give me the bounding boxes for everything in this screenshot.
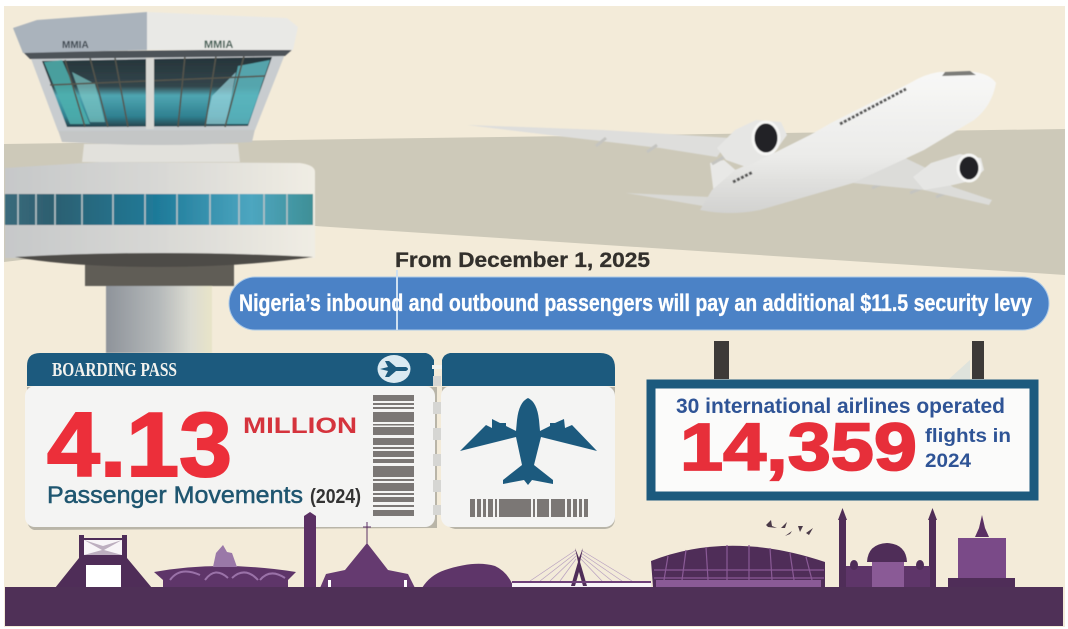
ring underside <box>15 253 313 267</box>
stub body <box>441 386 615 527</box>
ground <box>5 587 1063 626</box>
flights sign <box>651 341 1034 496</box>
boarding pass <box>25 353 615 530</box>
tower shaft <box>106 285 212 353</box>
left wing <box>467 125 730 157</box>
tailplane <box>626 193 710 206</box>
roof left <box>13 12 147 53</box>
cab glass <box>42 57 272 127</box>
icon: stub plane <box>460 398 597 485</box>
cab corner post <box>146 51 154 129</box>
cockpit <box>942 71 976 76</box>
glass reflections <box>44 60 90 124</box>
fuselage <box>700 72 996 213</box>
sign posts <box>714 341 729 379</box>
stub header <box>442 353 615 386</box>
bridge <box>512 548 651 587</box>
airplane <box>467 71 996 213</box>
big number: 4.13 <box>47 395 232 496</box>
cabin windows <box>840 89 906 124</box>
levy banner <box>229 270 1049 330</box>
flights in: flights in <box>925 426 1011 447</box>
MMIA sign left: MMIA <box>62 40 89 51</box>
sign board <box>651 384 1034 496</box>
tower ring <box>5 162 315 258</box>
pass shadow <box>27 387 615 530</box>
cab frame <box>30 54 285 131</box>
balcony <box>58 129 255 145</box>
rear windows <box>733 172 753 182</box>
flight count: 14,359 <box>680 410 917 485</box>
left engine <box>717 120 787 167</box>
pass header <box>27 353 434 386</box>
stadium <box>651 545 825 587</box>
right engine <box>913 154 984 190</box>
left engine inlet <box>753 122 779 154</box>
tail fin <box>710 160 739 195</box>
MMIA sign right: MMIA <box>204 39 233 51</box>
pass body <box>25 386 435 527</box>
barcode vertical <box>373 395 414 516</box>
tower collar <box>85 258 234 286</box>
ring windows <box>5 194 313 225</box>
building: church <box>320 522 415 588</box>
grey diagonal band <box>4 129 1065 275</box>
skyline <box>5 508 1063 626</box>
roof right <box>147 12 298 50</box>
year label: (2024) <box>310 486 361 508</box>
building: dome hall <box>422 564 514 588</box>
stub barcode <box>470 499 588 517</box>
passenger movements label: Passenger Movements <box>47 482 303 509</box>
boarding pass label: BOARDING PASS <box>52 359 177 381</box>
paper curl <box>949 360 970 379</box>
building: lotus hall <box>154 545 296 588</box>
birds <box>766 520 813 536</box>
icon: header plane <box>378 355 410 383</box>
flap fairings <box>596 138 948 197</box>
sign year: 2024 <box>925 451 971 472</box>
right wing <box>853 155 992 205</box>
building: tall tower <box>304 512 316 588</box>
date heading: From December 1, 2025 <box>395 249 650 272</box>
million label: MILLION <box>243 413 357 438</box>
perforation <box>432 365 442 515</box>
mosque <box>838 508 937 587</box>
control tower photo <box>5 12 315 353</box>
neck <box>82 144 240 162</box>
building: gateway <box>55 535 152 588</box>
roof dark band <box>23 49 293 59</box>
right engine inlet <box>958 155 980 181</box>
office tower <box>948 515 1015 587</box>
sign line 1: 30 international airlines operated <box>676 395 1005 418</box>
